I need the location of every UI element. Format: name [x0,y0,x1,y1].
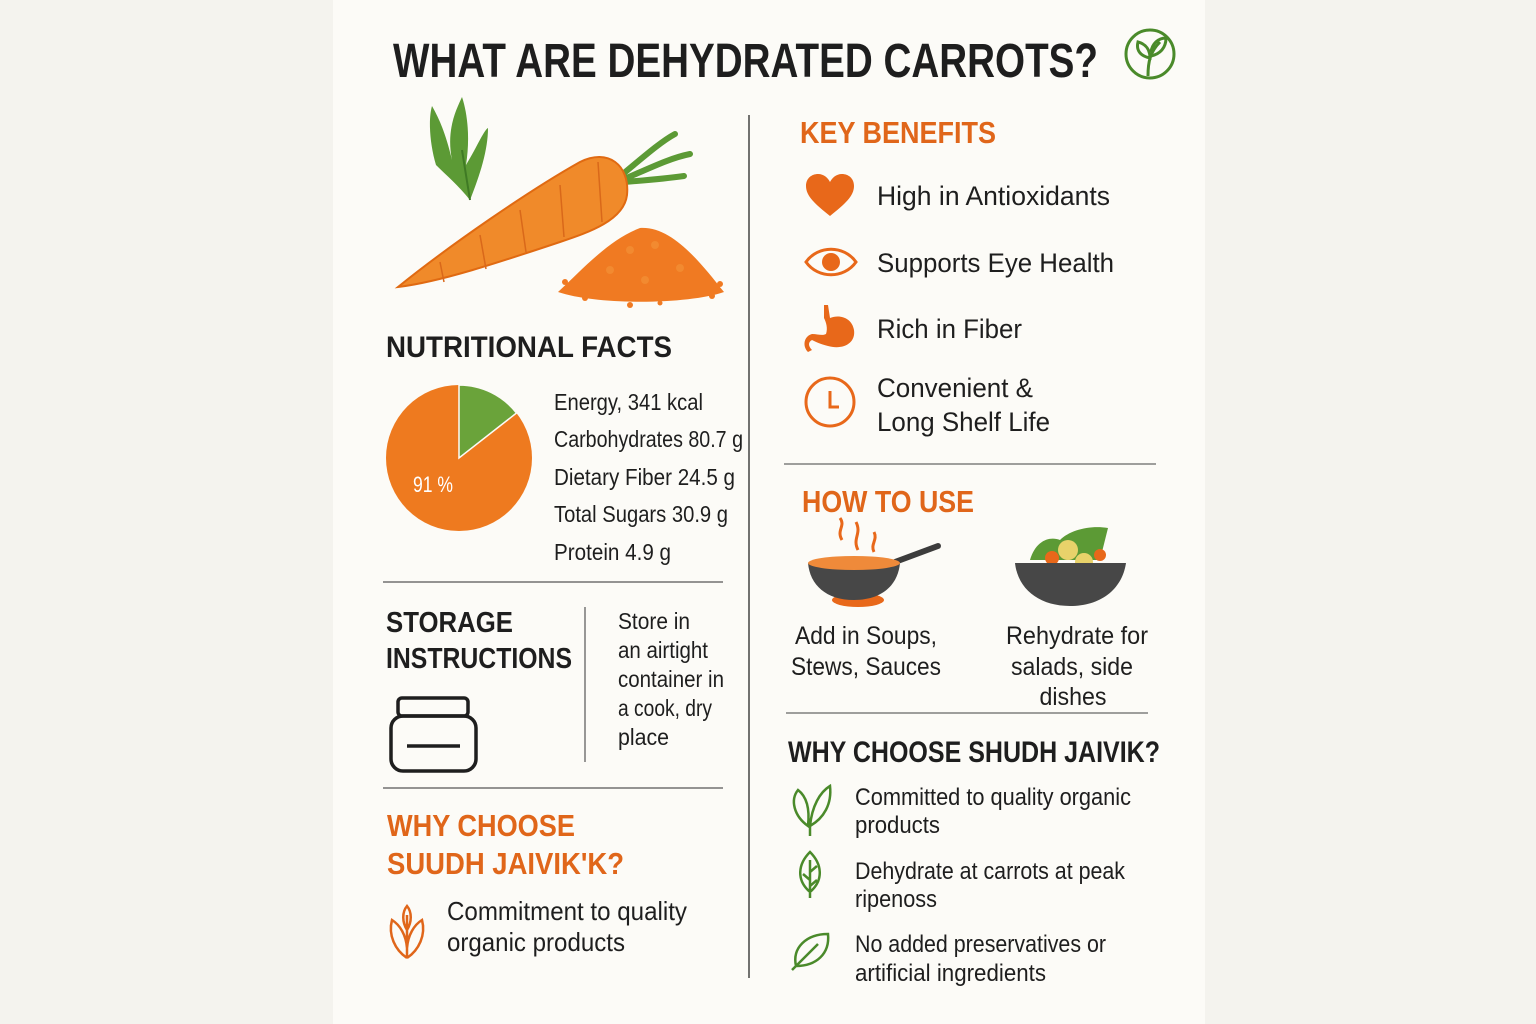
text: commitment [447,896,687,957]
icon: clock [806,378,854,426]
text: benefit 1: Committed to quality organic [855,784,1131,811]
text: nutrition values: Protein 4.9 g [554,539,671,565]
icon: heart [806,174,854,216]
heading: storage instructions: STORAGE [386,607,513,639]
text: fiber: Rich in Fiber [877,314,1022,344]
text: benefit 1: products [855,812,940,839]
icon: leaf badge [1126,30,1174,78]
heading: nutritional facts: NUTRITIONAL FACTS [386,331,672,364]
text: benefit 2 [855,858,1126,913]
heading: why choose (left) [387,808,624,881]
text: benefit 1 [855,784,1131,839]
heading: why choose (left): SUUDH JAIVIK'K? [387,846,624,881]
text: soups: Stews, Sauces [791,653,941,681]
heading: storage instructions: INSTRUCTIONS [386,643,572,675]
text: soups [791,622,941,681]
text: storage: an airtight [618,637,709,663]
text: antioxidants: High in Antioxidants [877,181,1110,211]
text: nutrition values: Dietary Fiber 24.5 g [554,464,735,490]
text: benefit 3: No added preservatives or [855,931,1106,958]
text: benefit 2: ripenoss [855,886,937,913]
panel: main card [333,0,1205,1024]
text: commitment: Commitment to quality [447,896,687,926]
icon: leaf 1 [794,786,830,836]
icon: jar [391,698,476,771]
text: storage: Store in [618,608,690,634]
text: benefit 3 [855,931,1106,987]
text: nutrition values: Total Sugars 30.9 g [554,501,728,527]
text: storage [618,608,724,750]
title: WHAT ARE DEHYDRATED CARROTS? [393,35,1098,88]
text: benefit 2: Dehydrate at carrots at peak [855,858,1126,885]
text: shelf life: Long Shelf Life [877,407,1050,437]
text: nutrition values: Carbohydrates 80.7 g [554,426,743,452]
heading: why choose shudh jaivik: WHY CHOOSE SHUDH JAIVIK? [788,736,1160,769]
text: soups: Add in Soups, [795,622,937,650]
icon: orange leaf [391,906,423,958]
heading: why choose (left): WHY CHOOSE [387,808,575,843]
text: rehydrate: Rehydrate for [1006,622,1148,650]
text: shelf life: Convenient & [877,373,1033,403]
heading: key benefits: KEY BENEFITS [800,115,996,150]
text: shelf life [877,373,1050,437]
text: storage: container in [618,666,724,692]
icon: leaf 2 [800,852,820,898]
text: nutrition values: Energy, 341 kcal [554,389,703,415]
icon: salad bowl [1015,527,1126,606]
text: rehydrate: salads, side [1011,653,1133,681]
heading: storage instructions [386,607,572,675]
text: eye health: Supports Eye Health [877,248,1114,278]
heading: how to use: HOW TO USE [802,484,974,519]
pie chart: 91 % [413,472,453,497]
text: storage: a cook, dry [618,695,712,721]
icon: stomach [805,305,854,352]
text: commitment: organic products [447,927,625,957]
text: nutrition values [554,389,743,565]
icon: eye [806,249,856,275]
icon: soup pot [808,518,938,607]
text: rehydrate: dishes [1040,683,1106,711]
text: benefit 3: artificial ingredients [855,960,1046,987]
text: rehydrate [1006,622,1148,711]
text: storage: place [618,724,669,750]
illustration: carrot [398,97,724,308]
icon: leaf 3 [792,934,828,970]
pie chart [386,385,532,531]
